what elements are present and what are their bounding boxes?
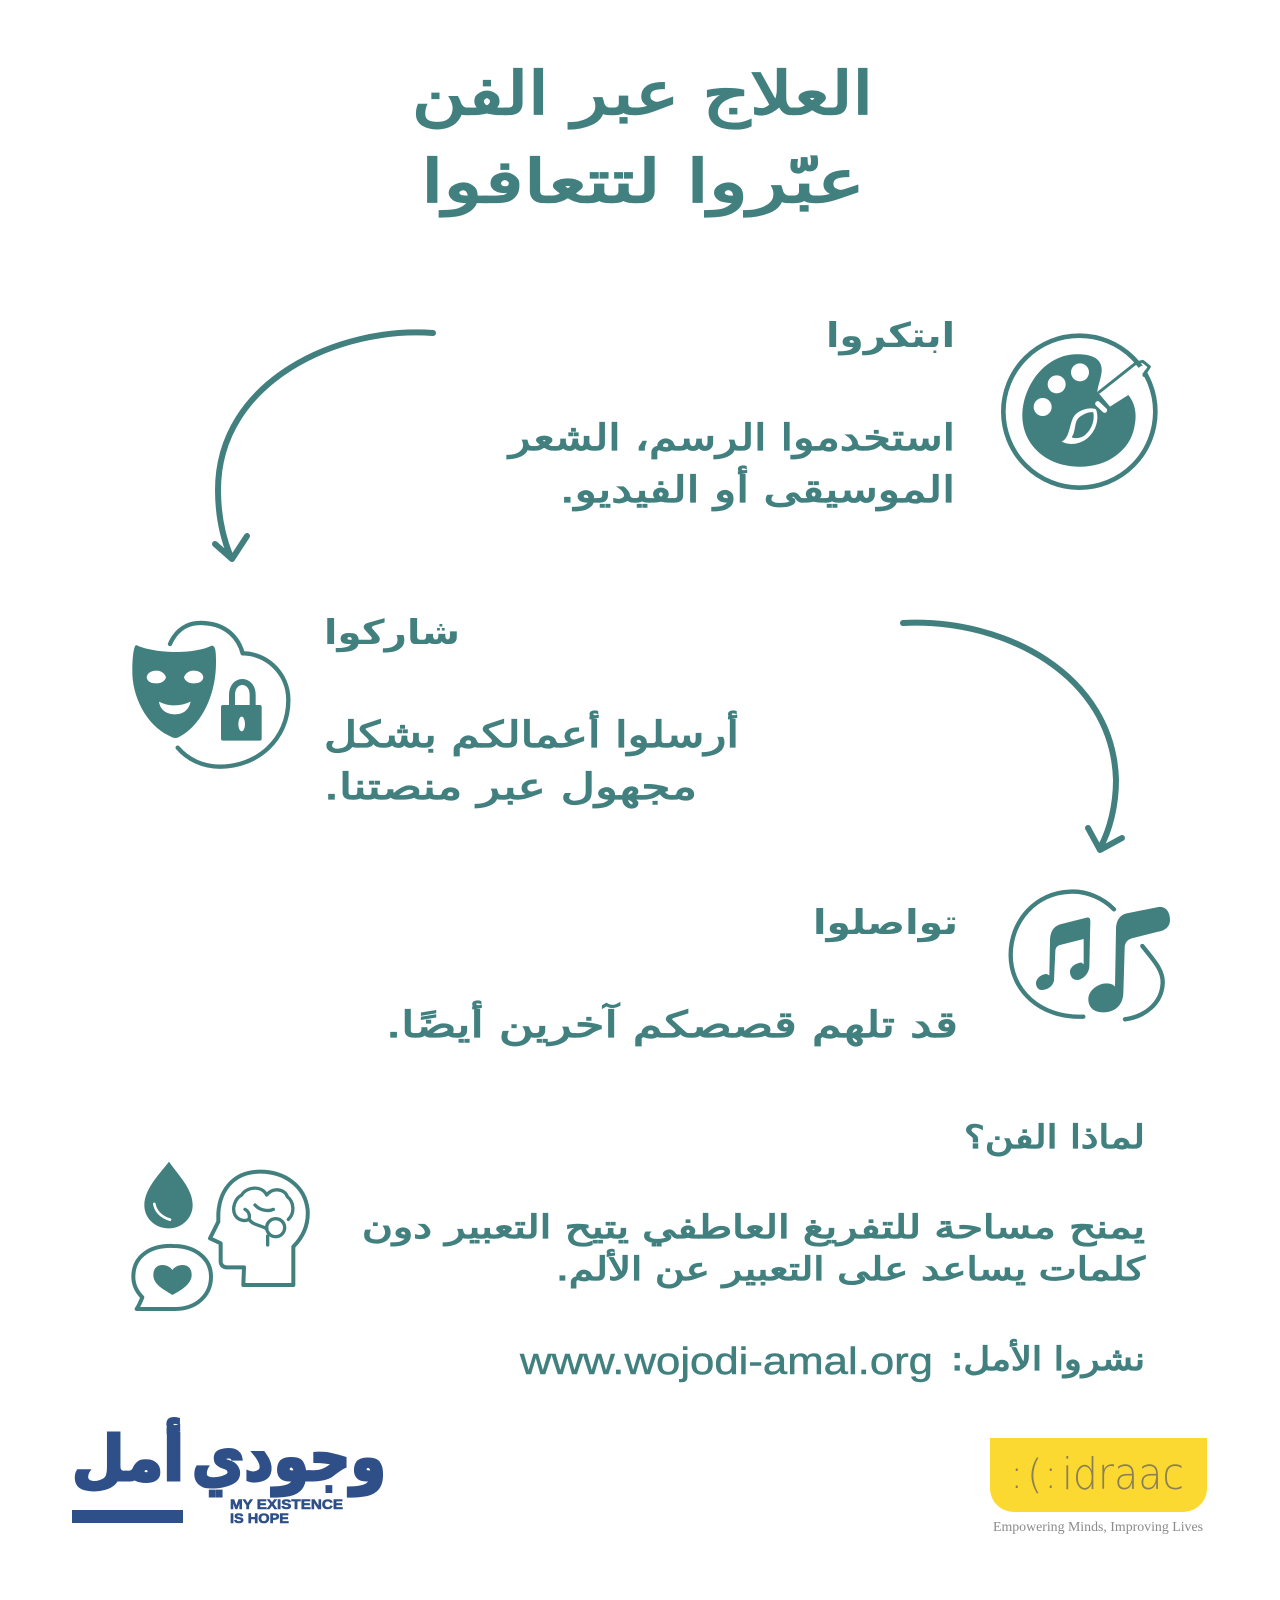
step: create text xyxy=(507,316,955,511)
call to action: website xyxy=(519,1339,1145,1383)
label: spread hope: نشروا الأمل: xyxy=(951,1339,1145,1378)
heading: connect: تواصلوا xyxy=(813,903,958,943)
logo: idraac xyxy=(990,1438,1207,1535)
section: why art text xyxy=(362,1118,1146,1288)
logo tagline: IS HOPE xyxy=(230,1510,289,1526)
body: why art xyxy=(362,1208,1146,1288)
url: www.wojodi-amal.org xyxy=(519,1341,933,1383)
title line 1: العلاج عبر الفن xyxy=(412,59,873,129)
arrow: share to connect xyxy=(903,623,1122,850)
heading: create: ابتكروا xyxy=(826,316,955,356)
logo: wojodi amal: وجودي xyxy=(192,1419,386,1497)
logo: wojodi amal xyxy=(72,1418,386,1526)
icon: music notes xyxy=(1011,892,1170,1019)
body: why art: يمنح مساحة للتفريغ العاطفي يتيح التعبير دون xyxy=(362,1208,1145,1246)
body: create: استخدموا الرسم، الشعر xyxy=(507,418,955,459)
arrow: create to share xyxy=(215,332,433,559)
icon: drop, heart bubble and head xyxy=(133,1162,308,1309)
heading: why art: لماذا الفن؟ xyxy=(964,1118,1145,1156)
body: connect: قد تلهم قصصكم آخرين أيضًا. xyxy=(386,1001,958,1046)
logo emoticon: :(: xyxy=(1010,1452,1057,1498)
logo tagline xyxy=(230,1496,343,1526)
body: share: أرسلوا أعمالكم بشكل xyxy=(324,711,739,756)
heading: share: شاركوا xyxy=(324,613,460,653)
logo: wojodi amal: أمل xyxy=(72,1418,184,1495)
body: create: الموسيقى أو الفيديو. xyxy=(560,466,955,511)
icon: mask and lock in cloud xyxy=(132,623,288,767)
body: share: مجهول عبر منصتنا. xyxy=(324,767,697,808)
logo tagline: MY EXISTENCE xyxy=(230,1496,343,1512)
body: why art: كلمات يساعد على التعبير عن الألم. xyxy=(556,1249,1146,1288)
logo wordmark: idraac xyxy=(1062,1449,1184,1500)
body: create xyxy=(507,418,955,511)
step: share text xyxy=(324,613,739,808)
icon: palette and brush xyxy=(1003,336,1155,488)
title line 2: عبّروا لتتعافوا xyxy=(421,147,865,217)
title xyxy=(412,59,873,217)
logo tagline: Empowering Minds, Improving Lives xyxy=(993,1520,1203,1535)
body: share xyxy=(324,711,739,808)
step: connect text xyxy=(386,903,958,1046)
